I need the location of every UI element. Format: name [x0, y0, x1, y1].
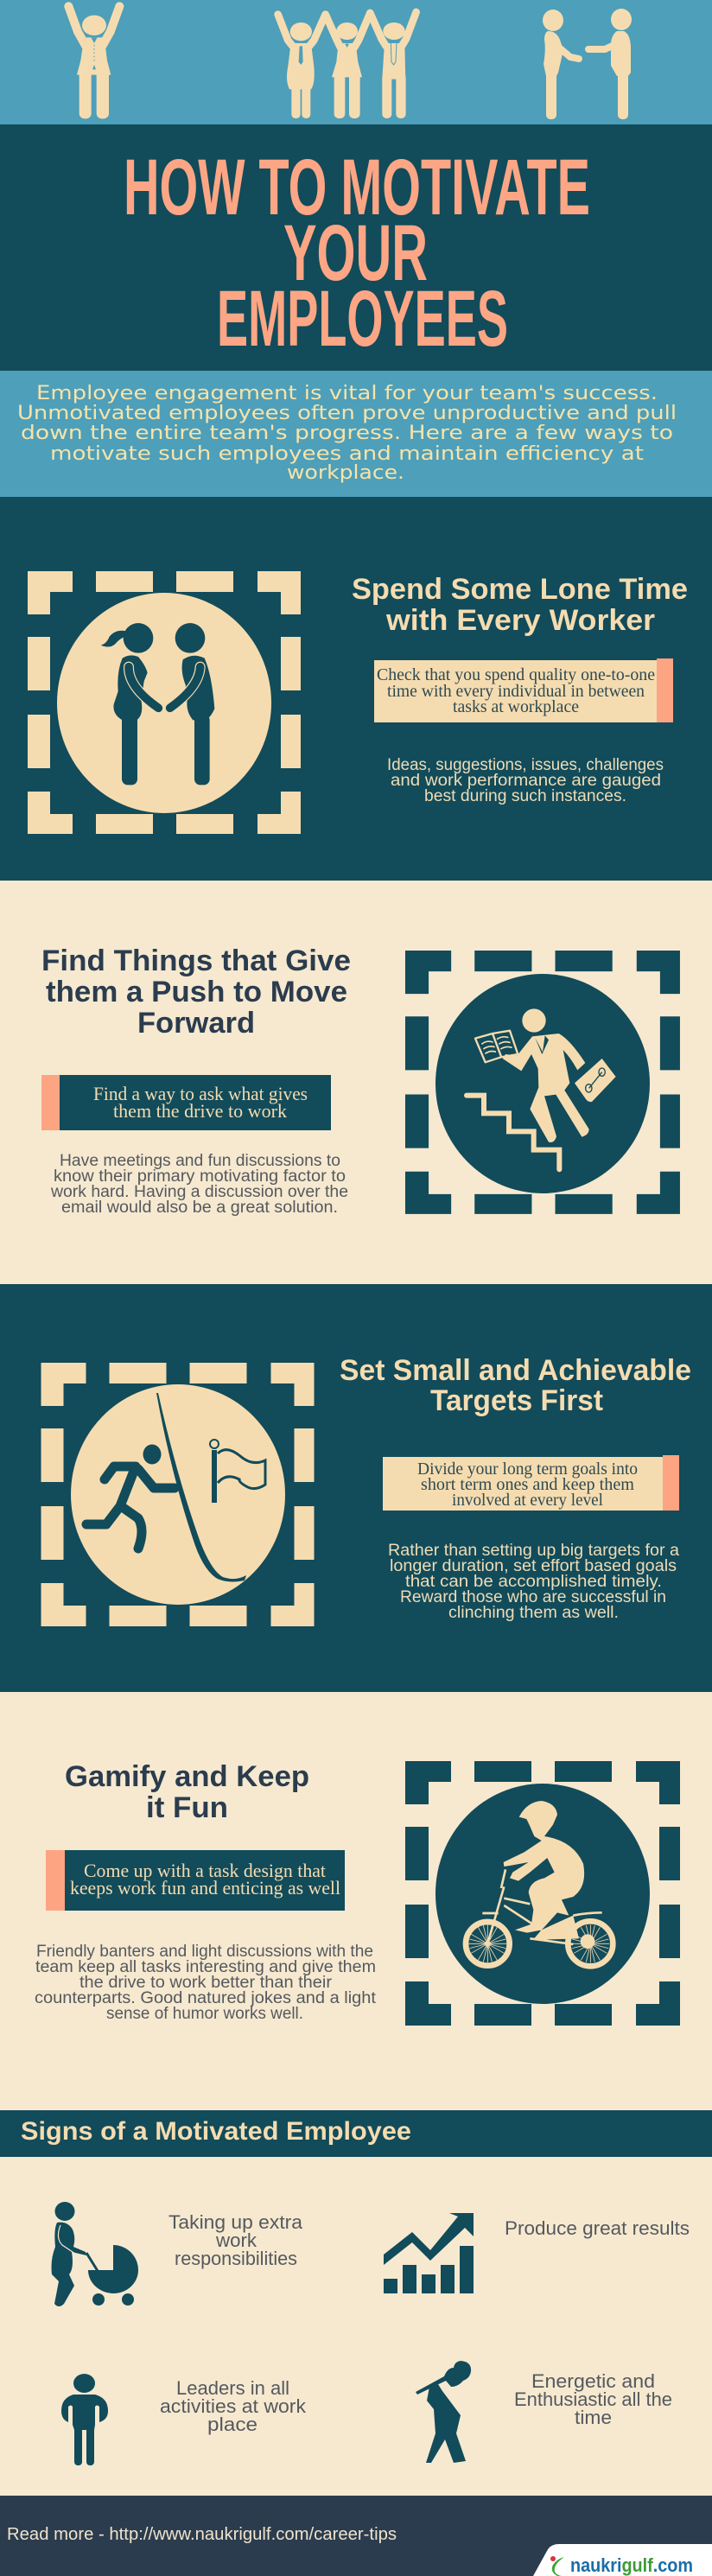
icon: handshake	[543, 9, 632, 119]
body text: best during such instances.	[424, 787, 626, 805]
heading: Spend Some Lone Time	[352, 573, 688, 606]
body text: team keep all tasks interesting and give them	[35, 1958, 376, 1976]
callout: keeps work fun and enticing as well	[70, 1877, 340, 1899]
text: responsibilities	[175, 2248, 297, 2269]
text: Taking up extra	[168, 2211, 303, 2233]
heading: with Every Worker	[385, 604, 655, 637]
callout: Check that you spend quality one-to-one	[377, 665, 655, 684]
callout	[383, 1455, 679, 1511]
icon frame	[405, 1761, 680, 2026]
callout: Divide your long term goals into	[417, 1460, 638, 1479]
body text: longer duration, set effort based goals	[390, 1557, 677, 1575]
heading	[352, 573, 688, 637]
panel: footer	[0, 2496, 712, 2576]
panel: gamify	[0, 1692, 712, 2110]
callout: Come up with a task design that	[84, 1860, 326, 1881]
callout: them the drive to work	[113, 1100, 287, 1122]
text: Enthusiastic all the	[514, 2388, 672, 2410]
read more link text: Read more - http://www.naukrigulf.com/career-tips	[7, 2525, 397, 2544]
logo: naukrigulf.com: naukrigulf.com	[570, 2554, 693, 2576]
text	[514, 2370, 672, 2428]
body text: counterparts. Good natured jokes and a light	[35, 1989, 377, 2007]
intro text: workplace.	[287, 462, 404, 484]
callout: involved at every level	[452, 1491, 603, 1510]
heading: Forward	[137, 1007, 255, 1040]
text: activities at work	[160, 2395, 307, 2417]
panel: spend lone time	[0, 497, 712, 881]
text: Leaders in all	[176, 2377, 289, 2399]
heading: Signs of a Motivated Employee	[21, 2117, 411, 2146]
title: EMPLOYEES	[217, 275, 508, 363]
heading: it Fun	[146, 1791, 228, 1824]
icon frame	[405, 951, 680, 1214]
heading	[41, 945, 351, 1040]
icon: man with hands on hips	[61, 2374, 108, 2465]
intro text: Unmotivated employees often prove unproductive and pull	[17, 403, 677, 424]
panel: find things that push	[0, 881, 712, 1284]
intro text: Employee engagement is vital for your team's success.	[36, 383, 658, 404]
heading	[340, 1354, 691, 1417]
heading: Gamify and Keep	[65, 1760, 309, 1793]
body text: sense of humor works well.	[106, 2005, 303, 2023]
body text: Ideas, suggestions, issues, challenges	[387, 756, 664, 774]
icon: guitarist	[416, 2361, 471, 2463]
callout	[46, 1850, 345, 1911]
body text: clinching them as well.	[448, 1604, 619, 1622]
callout: tasks at workplace	[453, 697, 579, 716]
body text: Reward those who are successful in	[400, 1588, 666, 1606]
body text: Friendly banters and light discussions with the	[36, 1943, 373, 1961]
body text	[387, 756, 664, 805]
callout: time with every individual in between	[387, 682, 645, 701]
title: YOUR	[283, 209, 428, 297]
icon: two colleagues facing	[57, 593, 271, 813]
heading: Targets First	[430, 1384, 603, 1417]
logo: naukrigulf.com	[533, 2544, 712, 2576]
panel: set small targets	[0, 1284, 712, 1692]
text: work	[215, 2229, 257, 2251]
panel: signs heading strip	[0, 2110, 712, 2157]
panel: introduction	[0, 371, 712, 497]
body text	[388, 1542, 679, 1622]
body text: email would also be a great solution.	[61, 1199, 338, 1217]
icon: runner and flag	[71, 1384, 285, 1605]
icon frame	[41, 1363, 315, 1626]
icon frame	[28, 571, 301, 834]
callout	[41, 1075, 331, 1130]
body text: that can be accomplished timely.	[405, 1573, 662, 1591]
body text: Have meetings and fun discussions to	[60, 1152, 340, 1170]
heading: Set Small and Achievable	[340, 1354, 691, 1387]
text	[160, 2377, 307, 2435]
panel: signs list	[0, 2157, 712, 2496]
icon: businessman climbing stairs	[435, 974, 650, 1193]
heading: them a Push to Move	[46, 976, 347, 1008]
icon: three colleagues holding hands up	[278, 12, 416, 118]
icon: woman with raised arms	[68, 6, 119, 118]
panel: title band	[0, 124, 712, 371]
icon: woman with stroller	[52, 2202, 138, 2306]
heading	[65, 1760, 309, 1824]
body text: the drive to work better than their	[79, 1974, 333, 1992]
callout: short term ones and keep them	[421, 1475, 634, 1494]
text: Energetic and	[531, 2370, 655, 2392]
body text	[50, 1152, 348, 1217]
intro text: motivate such employees and maintain efficiency at	[50, 443, 644, 465]
callout	[374, 658, 673, 722]
heading: Find Things that Give	[41, 945, 351, 977]
body text: work hard. Having a discussion over the	[50, 1183, 348, 1201]
body text	[35, 1943, 377, 2023]
text: place	[207, 2414, 257, 2435]
body text: and work performance are gauged	[391, 772, 661, 790]
icon: growth chart	[384, 2213, 474, 2293]
icon: boy riding a bicycle	[435, 1784, 650, 2004]
text: time	[575, 2407, 612, 2428]
body text: Rather than setting up big targets for a	[388, 1542, 679, 1560]
callout: Find a way to ask what gives	[93, 1083, 308, 1104]
intro text: down the entire team's progress. Here are a few ways to	[21, 423, 673, 444]
title	[124, 143, 590, 363]
body text: know their primary motivating factor to	[54, 1167, 346, 1186]
text	[168, 2211, 303, 2269]
intro text	[17, 383, 677, 484]
panel: top figures band	[0, 0, 712, 124]
text: Produce great results	[505, 2217, 690, 2239]
